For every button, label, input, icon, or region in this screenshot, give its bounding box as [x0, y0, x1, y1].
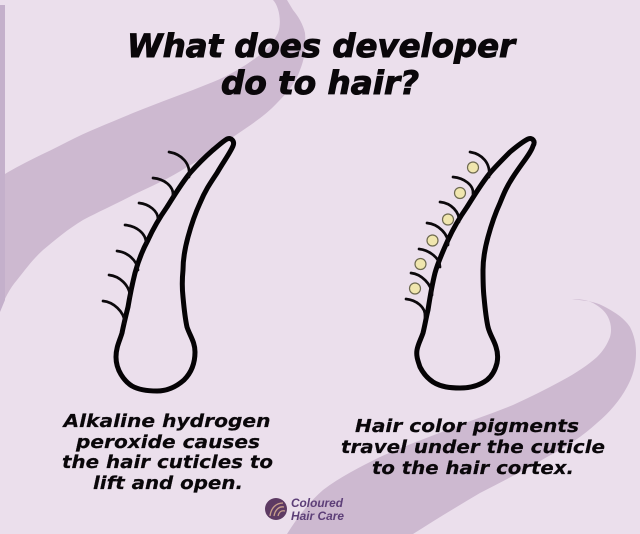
title: What does developer: [127, 27, 517, 65]
logo text: Hair Care: [291, 511, 345, 523]
cuticles: [103, 152, 189, 323]
diagram: hair with lifted cuticles: [103, 138, 234, 391]
pigments: [410, 162, 478, 294]
cuticles: [406, 152, 489, 317]
swoosh: lower right: [287, 299, 636, 534]
right caption: travel under the cuticle: [341, 437, 605, 458]
right caption: [341, 416, 605, 479]
swoosh: upper left: [0, 0, 305, 310]
left edge strip: [0, 5, 5, 312]
hair outline: [417, 138, 534, 388]
left caption: lift and open.: [93, 473, 243, 494]
right caption: Hair color pigments: [355, 416, 579, 437]
hair outline: [116, 138, 234, 391]
logo text: Coloured: [291, 498, 344, 510]
title: do to hair?: [221, 64, 419, 102]
left caption: peroxide causes: [75, 432, 260, 453]
left caption: [61, 411, 273, 494]
diagram: hair with pigments under cuticles: [406, 138, 534, 388]
logo text: [291, 498, 345, 523]
left caption: the hair cuticles to: [62, 452, 273, 473]
title: [127, 27, 517, 102]
logo icon: [265, 498, 287, 520]
left caption: Alkaline hydrogen: [61, 411, 270, 432]
right caption: to the hair cortex.: [372, 458, 574, 479]
logo: [265, 498, 345, 523]
